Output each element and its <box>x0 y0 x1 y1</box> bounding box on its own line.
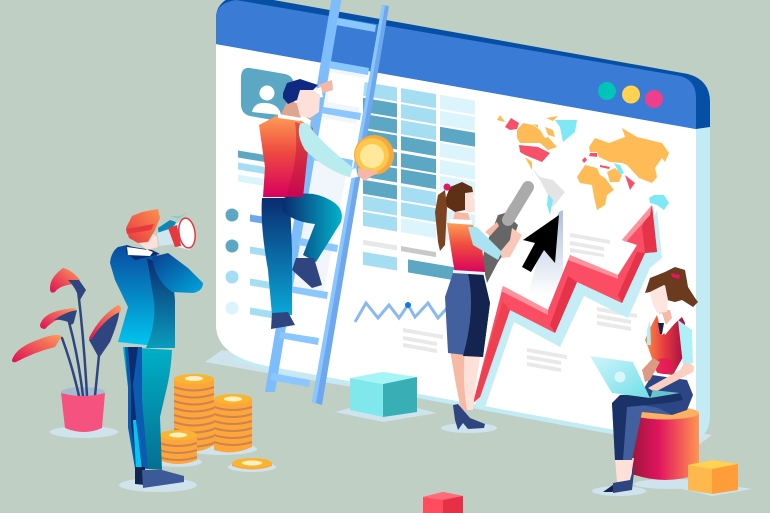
laptop screen <box>590 356 650 398</box>
cuff <box>350 168 358 178</box>
leaf right <box>89 306 119 358</box>
holding hand <box>358 168 379 181</box>
australia <box>649 195 669 210</box>
floor shadow <box>119 478 197 492</box>
jacket <box>110 245 175 348</box>
trouser light stripe <box>133 420 142 468</box>
central asia cyan <box>614 163 624 175</box>
neck <box>453 212 470 220</box>
central america <box>525 157 532 170</box>
front shoe <box>142 470 184 488</box>
vest <box>645 315 685 375</box>
greenland <box>555 120 577 142</box>
plant shadow <box>50 426 118 438</box>
ladder rungs <box>270 18 376 387</box>
front shoe <box>613 463 635 493</box>
pot rim <box>61 387 105 397</box>
ladder right rail <box>312 5 389 405</box>
rising arrow <box>473 205 662 410</box>
africa <box>577 165 614 210</box>
floor shadow <box>441 423 497 433</box>
coin stack tall <box>174 374 214 452</box>
india red <box>625 175 635 190</box>
legs <box>450 350 481 410</box>
leaf middle <box>40 308 76 329</box>
united states <box>519 145 550 162</box>
coin stacks <box>154 374 276 472</box>
megaphone <box>157 212 197 250</box>
arrow side faces <box>473 302 510 403</box>
stool <box>631 406 706 489</box>
window top edge <box>216 0 710 129</box>
person: man with megaphone <box>110 209 203 492</box>
coin stack short <box>159 430 197 464</box>
single coin <box>232 458 272 470</box>
trouser blue stripe <box>125 347 148 468</box>
arabia <box>607 168 622 182</box>
window title bar <box>216 0 696 129</box>
alaska <box>505 118 519 130</box>
rear leg <box>262 198 292 315</box>
vest <box>259 115 313 197</box>
data table <box>363 82 475 284</box>
raised arm shadow <box>303 97 320 122</box>
world map <box>497 115 669 215</box>
raised cuff <box>315 87 323 98</box>
hair band <box>126 224 154 234</box>
eurasia <box>589 128 669 183</box>
rear arm <box>642 358 660 382</box>
tie <box>658 323 664 334</box>
vest <box>447 223 485 273</box>
hips <box>640 375 693 415</box>
window white page <box>216 40 696 445</box>
text lines: left <box>403 328 443 353</box>
person: woman with telescope <box>435 182 528 433</box>
red cube <box>423 492 463 513</box>
front arm <box>648 363 694 392</box>
hair <box>126 209 160 243</box>
collar <box>657 313 681 335</box>
arrow top highlights <box>501 205 652 315</box>
yellow cube <box>670 460 752 496</box>
laptop logo <box>614 372 626 382</box>
coin stack right <box>214 394 252 452</box>
person: climbing man <box>259 79 394 329</box>
telescope barrel <box>508 187 528 220</box>
sleeve <box>468 227 502 260</box>
raised hand <box>318 80 333 93</box>
stool shadow <box>634 479 706 489</box>
collar <box>278 114 302 121</box>
face <box>465 192 475 213</box>
vest shading <box>285 122 313 197</box>
leaf top <box>50 268 80 293</box>
cursor pointer <box>522 210 563 295</box>
ladder left rail <box>265 0 342 392</box>
hair <box>645 267 698 307</box>
title bar buttons <box>598 82 663 108</box>
hair <box>283 79 318 104</box>
person: seated woman with laptop <box>590 267 706 496</box>
skirt <box>445 273 490 357</box>
north america <box>517 123 557 150</box>
laptop base <box>650 390 680 398</box>
text lines: middle <box>527 348 567 372</box>
stems <box>62 290 99 396</box>
europe red <box>582 153 610 169</box>
arrow shadow <box>475 210 662 410</box>
left list bullets <box>226 208 238 314</box>
face <box>650 285 668 313</box>
floor shadow under window <box>205 350 712 444</box>
telescope barrel base <box>508 208 515 220</box>
dark rear leg <box>612 393 683 460</box>
collar <box>450 219 472 224</box>
front shoe <box>292 258 322 288</box>
canada islands <box>497 115 558 137</box>
south america tip <box>547 194 553 215</box>
south america <box>532 168 565 207</box>
front thigh and shin <box>283 193 342 262</box>
raised arm <box>152 253 203 293</box>
waistband <box>453 270 485 275</box>
profile avatar card <box>241 68 294 122</box>
jacket shaded side <box>146 258 175 348</box>
leaf left <box>12 335 62 362</box>
ladder back panel shadow <box>290 68 366 300</box>
ponytail <box>435 190 447 251</box>
text lines: top right <box>570 233 610 257</box>
feet shadow <box>592 486 646 496</box>
neck <box>280 100 302 122</box>
jacket collar <box>126 246 160 260</box>
left summary lines <box>238 150 290 321</box>
heels <box>453 404 485 430</box>
hair tie <box>444 184 450 190</box>
face <box>296 90 320 118</box>
shirt collar <box>127 247 153 256</box>
hair tie <box>671 273 680 279</box>
ankles <box>615 458 634 482</box>
pot <box>61 393 105 432</box>
teal cube <box>335 372 437 422</box>
rear hand <box>485 222 499 236</box>
coin shadows <box>154 443 276 472</box>
skirt dark panel <box>463 273 490 357</box>
face <box>139 230 158 250</box>
trouser dark stripe <box>128 347 143 468</box>
panel: browser window <box>216 0 710 448</box>
text lines: right <box>597 307 637 331</box>
arrow body <box>473 205 657 403</box>
neck <box>658 310 672 328</box>
hair <box>445 182 473 212</box>
sleeve <box>299 123 356 178</box>
plant <box>12 268 121 438</box>
sleeves <box>647 320 693 365</box>
vest lower blob <box>654 358 674 374</box>
coin <box>354 135 394 175</box>
line chart <box>355 302 448 322</box>
trousers <box>123 347 172 470</box>
forearm and hand <box>500 228 522 258</box>
front leg <box>612 403 672 460</box>
window side wall <box>230 126 710 448</box>
telescope body <box>482 213 518 283</box>
ladder <box>265 0 389 405</box>
rear shoe <box>603 482 620 492</box>
rear shoe <box>135 467 145 485</box>
rear shoe <box>271 312 295 329</box>
